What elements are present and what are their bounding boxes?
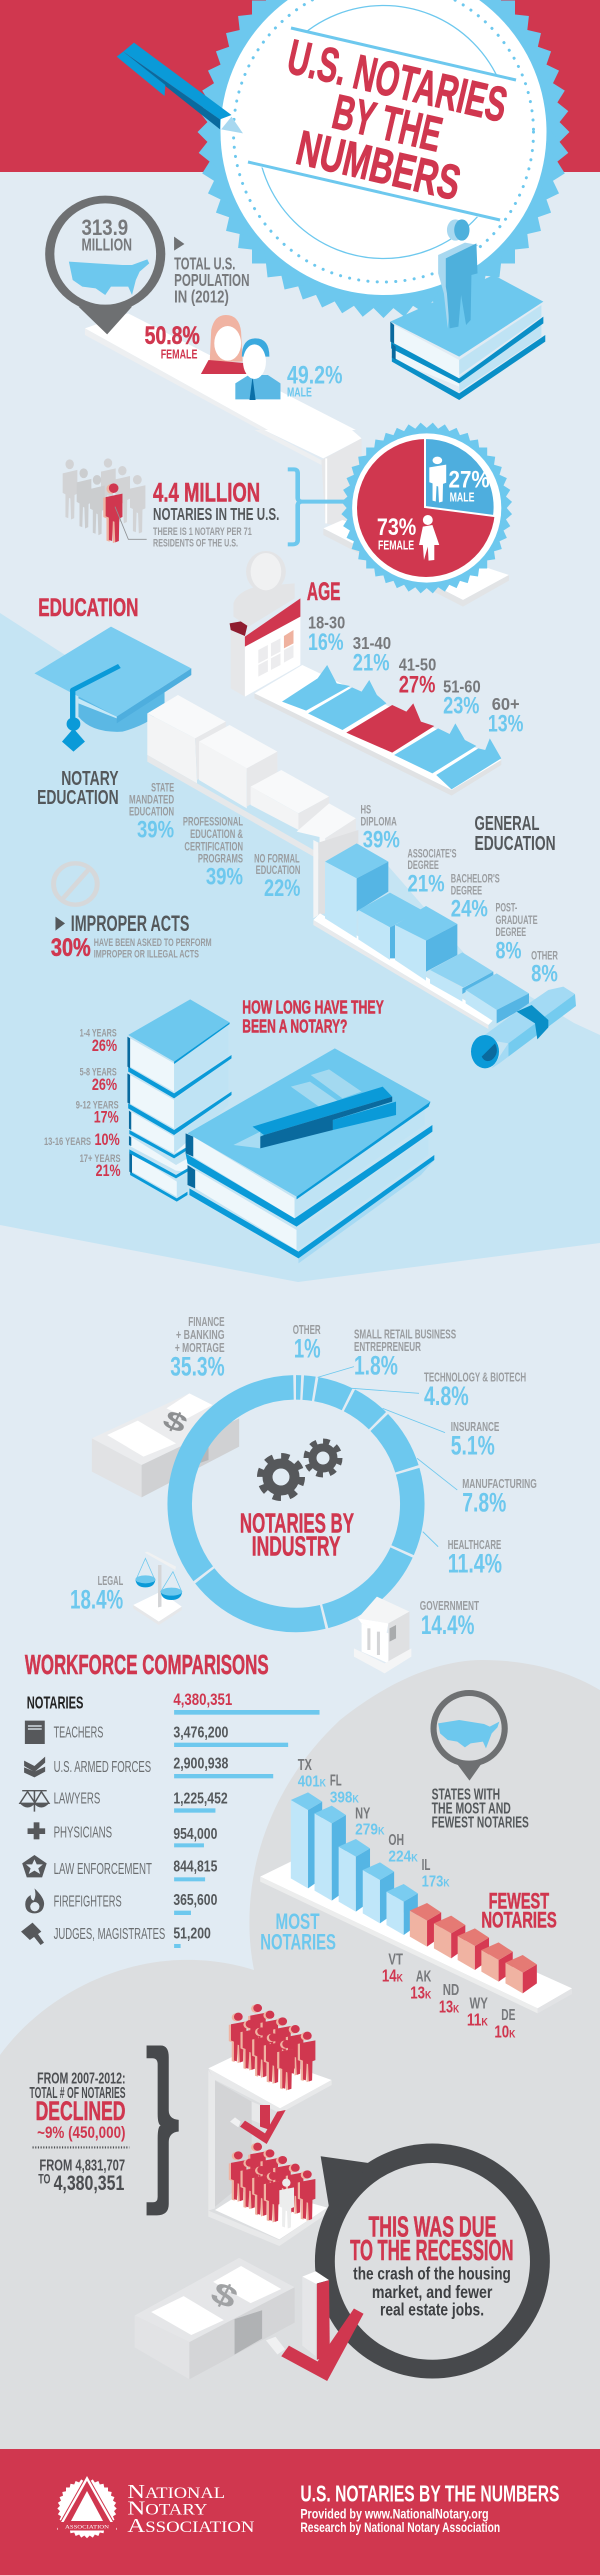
years labels: 26% xyxy=(92,1036,117,1055)
heading: how long xyxy=(242,998,384,1037)
title seal xyxy=(198,0,569,318)
state mandated education: MANDATED xyxy=(129,792,174,806)
panel: notaries by industry: LEGAL xyxy=(98,1574,123,1589)
manufacturing share: 7.8% xyxy=(462,1488,506,1518)
donut chart xyxy=(180,1387,412,1620)
row: firefighters xyxy=(25,1888,217,1915)
brace xyxy=(147,2045,179,2215)
post-graduate degree: POST- xyxy=(496,901,517,914)
heading: how long: BEEN A NOTARY? xyxy=(242,1017,347,1037)
states caption: STATES WITH xyxy=(432,1786,500,1803)
associate's degree xyxy=(408,846,457,897)
bachelor's degree xyxy=(451,871,500,922)
years labels: 5-8 YEARS xyxy=(80,1067,117,1078)
fewest notaries label: FEWEST xyxy=(489,1890,549,1914)
years labels xyxy=(44,1028,121,1180)
state labels: most: TX xyxy=(298,1755,312,1774)
row: notaries: NOTARIES xyxy=(27,1693,83,1712)
row: physicians xyxy=(28,1822,217,1847)
post-graduate degree: GRADUATE xyxy=(496,913,538,927)
row: law enforcement xyxy=(22,1855,218,1881)
insurance share: INSURANCE xyxy=(451,1420,499,1435)
state labels: most: NY xyxy=(355,1803,371,1822)
heading: age: AGE xyxy=(307,577,341,606)
finance share: + MORTAGE xyxy=(175,1341,225,1356)
associate's degree: 21% xyxy=(408,871,445,897)
notary education label xyxy=(37,766,119,809)
panel: states with most and fewest notaries xyxy=(260,1690,572,2041)
government share: GOVERNMENT xyxy=(420,1599,479,1614)
post-graduate degree xyxy=(496,901,538,964)
state labels: most: IL xyxy=(422,1855,430,1874)
row: notaries: 4,380,351 xyxy=(173,1690,232,1709)
age strip base xyxy=(254,665,501,796)
improper acts text: IMPROPER ACTS xyxy=(71,912,189,937)
row: lawyers xyxy=(20,1788,228,1813)
pie seal xyxy=(341,423,512,593)
heading: general education: GENERAL xyxy=(474,811,540,835)
state mandated education xyxy=(129,781,174,843)
platform xyxy=(260,1862,572,2013)
decline text: ~9% (450,000) xyxy=(37,2123,126,2142)
professional education: PROGRAMS xyxy=(198,851,243,865)
no formal education: EDUCATION xyxy=(256,863,300,877)
state labels: fewest: 11K xyxy=(467,2010,488,2029)
icon: person standing on book stack xyxy=(390,219,545,400)
states caption xyxy=(432,1786,529,1831)
years labels: 17+ YEARS xyxy=(80,1154,121,1165)
improper acts text: HAVE BEEN ASKED TO PERFORM xyxy=(94,936,212,949)
row: judges: JUDGES, MAGISTRATES xyxy=(54,1924,165,1943)
associate's degree: DEGREE xyxy=(408,858,439,872)
icon: prohibited sign xyxy=(54,863,97,905)
header band xyxy=(0,0,600,172)
elevator frame with two platforms xyxy=(208,2050,332,2246)
other education: 8% xyxy=(531,961,558,987)
icon: money stack xyxy=(135,2258,295,2379)
technology share: 4.8% xyxy=(424,1382,469,1412)
row: teachers: TEACHERS xyxy=(54,1722,103,1741)
small retail share: SMALL RETAIL BUSINESS xyxy=(354,1327,456,1342)
years labels: 17% xyxy=(94,1108,119,1126)
icon: woman xyxy=(201,315,251,374)
small retail share xyxy=(354,1327,456,1381)
healthcare share xyxy=(448,1538,502,1579)
legal share xyxy=(70,1574,123,1615)
states caption: FEWEST NOTARIES xyxy=(432,1814,529,1831)
icon: money stack xyxy=(92,1393,239,1497)
total population label: POPULATION xyxy=(174,270,249,290)
age labels: 18-30 xyxy=(308,613,345,633)
red crowd bottom with one gray figure xyxy=(229,2143,315,2229)
state labels: fewest: 13K xyxy=(439,1997,459,2016)
row: armed forces: 2,900,938 xyxy=(173,1753,229,1772)
decline text: FROM 2007-2012: xyxy=(37,2070,126,2088)
fewest notaries label xyxy=(481,1890,557,1933)
age labels: 60+ xyxy=(492,694,520,715)
footer band xyxy=(0,2449,600,2575)
red crowd top xyxy=(229,2004,315,2090)
footer credits: Research by National Notary Association xyxy=(300,2520,500,2535)
notaries count: RESIDENTS OF THE U.S. xyxy=(153,536,238,549)
logo seal xyxy=(56,2475,118,2538)
row: armed forces xyxy=(24,1753,273,1778)
state labels: most: OH xyxy=(388,1830,404,1849)
row: law enforcement: 844,815 xyxy=(173,1857,218,1875)
row: lawyers: 1,225,452 xyxy=(173,1788,228,1807)
most notaries label: MOST xyxy=(276,1910,320,1935)
decline text xyxy=(29,2070,129,2195)
icon: scales xyxy=(133,1552,182,1625)
bachelor's degree: DEGREE xyxy=(451,883,482,897)
years labels: 21% xyxy=(96,1161,121,1180)
state mandated education: STATE xyxy=(151,781,174,794)
icon: female figure xyxy=(419,515,439,561)
small retail share: 1.8% xyxy=(354,1351,398,1381)
logo wordmark: NATIONAL xyxy=(127,2480,225,2503)
other share: OTHER xyxy=(293,1323,321,1338)
row: judges xyxy=(21,1923,211,1948)
improper acts text xyxy=(51,912,212,962)
state labels: most: 279K xyxy=(355,1819,385,1838)
other share xyxy=(293,1323,321,1364)
decline text: 4,380,351 xyxy=(54,2171,124,2195)
icon: calendar stamp xyxy=(230,551,300,697)
notaries count: THERE IS 1 NOTARY PER 71 xyxy=(153,525,252,538)
other share: 1% xyxy=(294,1334,321,1364)
icon: male figure xyxy=(429,457,446,503)
female share: FEMALE xyxy=(161,347,197,361)
HS diploma: 39% xyxy=(363,827,400,853)
row: teachers xyxy=(25,1721,288,1747)
state labels: fewest: DE xyxy=(501,2005,515,2024)
healthcare share: 11.4% xyxy=(448,1549,502,1579)
panel: workforce comparisons xyxy=(20,1650,320,1948)
row: lawyers: LAWYERS xyxy=(54,1788,100,1807)
heading: notaries by industry: NOTARIES BY xyxy=(240,1509,354,1539)
icon: diploma scroll xyxy=(471,987,576,1068)
notaries count: 4.4 MILLION xyxy=(153,478,260,508)
male share xyxy=(448,467,490,505)
state mandated education: EDUCATION xyxy=(129,805,174,818)
icon: crowd with one notary highlighted xyxy=(63,458,147,543)
total population label xyxy=(174,237,249,306)
icon: government building xyxy=(354,1597,411,1673)
panel: how long notary xyxy=(44,998,434,1263)
row: firefighters: FIREFIGHTERS xyxy=(54,1891,122,1910)
icon: pen pointing at seal xyxy=(117,43,243,133)
speech bubble: real estate jobs. xyxy=(380,2299,484,2319)
female share: 73% xyxy=(377,515,416,541)
state labels: fewest: 10K xyxy=(494,2022,516,2041)
no formal education: NO FORMAL xyxy=(254,851,300,865)
column and base of notaries shelf xyxy=(254,430,509,607)
small retail share: ENTREPRENEUR xyxy=(354,1340,421,1355)
legal share: 18.4% xyxy=(70,1585,123,1615)
state mandated education: 39% xyxy=(137,817,174,843)
no formal education xyxy=(254,851,300,902)
associate's degree: ASSOCIATE'S xyxy=(408,846,457,860)
row: armed forces: U.S. ARMED FORCES xyxy=(54,1757,151,1776)
heading: notaries by industry: INDUSTRY xyxy=(252,1532,341,1562)
total population label: IN (2012) xyxy=(174,287,229,306)
row: judges: 51,200 xyxy=(173,1923,211,1942)
icon: map pin with population xyxy=(45,196,165,334)
row: law enforcement: LAW ENFORCEMENT xyxy=(54,1859,152,1878)
logo wordmark: NOTARY xyxy=(127,2496,208,2519)
female share: 50.8% xyxy=(145,321,200,350)
decline text: FROM 4,831,707 xyxy=(39,2157,125,2174)
heading: education: EDUCATION xyxy=(38,593,139,622)
icon: map pin with population: 313.9 xyxy=(82,216,128,241)
seal starburst xyxy=(198,0,569,318)
panel: number of notaries xyxy=(63,458,346,549)
row: physicians: PHYSICIANS xyxy=(54,1823,112,1841)
stacked small books xyxy=(127,999,232,1202)
education steps xyxy=(147,695,356,860)
professional education: 39% xyxy=(206,864,243,890)
heading: workforce comparisons: WORKFORCE COMPARISONS xyxy=(25,1650,269,1681)
male share: MALE xyxy=(450,491,474,505)
state labels: fewest: ND xyxy=(443,1980,459,1999)
panel: gender of notaries pie xyxy=(341,423,512,593)
years labels: 26% xyxy=(92,1075,117,1094)
age labels xyxy=(308,613,523,737)
speech bubble: market, and fewer xyxy=(372,2282,492,2302)
row: teachers: 3,476,200 xyxy=(173,1723,228,1741)
footer credits xyxy=(300,2481,559,2535)
decline text: TO xyxy=(38,2171,51,2186)
logo wordmark xyxy=(127,2480,255,2537)
healthcare share: HEALTHCARE xyxy=(448,1538,501,1553)
state labels: most: FL xyxy=(330,1771,342,1789)
age labels: 16% xyxy=(308,630,344,656)
years labels: 9-12 YEARS xyxy=(76,1100,119,1111)
age labels: 51-60 xyxy=(443,677,481,697)
age labels: 41-50 xyxy=(399,655,436,675)
age labels: 31-40 xyxy=(353,633,391,654)
other education: OTHER xyxy=(531,948,558,962)
male share xyxy=(287,360,342,399)
finance share: 35.3% xyxy=(170,1352,225,1382)
total population label: TOTAL U.S. xyxy=(174,254,235,273)
notaries count xyxy=(153,478,279,549)
heading: general education xyxy=(474,811,556,855)
notary education label: EDUCATION xyxy=(37,785,119,809)
bars: fewest notaries xyxy=(410,1903,537,1993)
title: BY THE xyxy=(328,85,447,162)
speech bubble xyxy=(315,2144,550,2379)
HS diploma xyxy=(360,802,400,853)
decline text: DECLINED xyxy=(36,2096,126,2126)
state labels: most: 398K xyxy=(330,1787,359,1806)
panel: improper acts xyxy=(51,863,212,962)
decline text: TOTAL # OF NOTARIES xyxy=(29,2084,126,2102)
post-graduate degree: DEGREE xyxy=(496,925,526,939)
panel: general education xyxy=(313,802,576,1068)
male share: 27% xyxy=(448,467,490,493)
panel: population xyxy=(45,196,342,400)
HS diploma: HS xyxy=(360,802,371,816)
insurance share xyxy=(451,1420,499,1461)
no formal education: 22% xyxy=(264,876,300,902)
icon: money stack: $ xyxy=(205,2275,243,2315)
panel: notary education xyxy=(34,593,356,902)
state labels: fewest xyxy=(382,1949,516,2041)
insurance share: 5.1% xyxy=(451,1431,495,1461)
panel: age xyxy=(230,551,523,796)
logo seal: ASSOCIATION xyxy=(65,2524,109,2530)
post-graduate degree: 8% xyxy=(496,938,522,964)
manufacturing share xyxy=(462,1477,537,1518)
female share xyxy=(145,321,200,361)
icon: gears xyxy=(260,1442,340,1498)
speech bubble: THIS WAS DUE xyxy=(368,2212,496,2243)
title: NUMBERS xyxy=(292,121,465,211)
bachelor's degree: BACHELOR'S xyxy=(451,871,500,885)
state labels: fewest: 14K xyxy=(382,1966,403,1985)
footer logo: National Notary Association xyxy=(56,2475,255,2538)
icon: map pin with population: MILLION xyxy=(82,235,132,254)
years labels: 13-16 YEARS xyxy=(44,1137,91,1148)
other education xyxy=(531,948,558,987)
professional education xyxy=(183,815,243,890)
state labels: fewest: AK xyxy=(416,1967,432,1985)
female share xyxy=(377,515,416,553)
row: notaries xyxy=(27,1690,320,1715)
leader lines xyxy=(318,1367,457,1547)
states caption: THE MOST AND xyxy=(432,1800,511,1817)
government share: 14.4% xyxy=(421,1611,474,1640)
speech bubble: the crash of the housing xyxy=(353,2263,511,2283)
notary education label: NOTARY xyxy=(61,766,119,790)
heading: notaries by industry xyxy=(240,1509,354,1562)
state labels: fewest: VT xyxy=(388,1949,403,1968)
bachelor's degree: 24% xyxy=(451,896,488,922)
professional education: EDUCATION & xyxy=(190,827,243,841)
age bars xyxy=(282,665,501,789)
icon: money stack: $ xyxy=(158,1405,192,1439)
row: physicians: 954,000 xyxy=(173,1824,217,1843)
improper acts text: IMPROPER OR ILLEGAL ACTS xyxy=(94,947,199,960)
male share: 49.2% xyxy=(287,360,342,389)
general education blocks xyxy=(313,830,529,1029)
logo wordmark: ASSOCIATION xyxy=(127,2514,255,2537)
improper acts text: 30% xyxy=(51,934,91,962)
panel: notaries by industry xyxy=(70,1315,537,1673)
professional education: CERTIFICATION xyxy=(184,839,243,853)
notaries count: NOTARIES IN THE U.S. xyxy=(153,504,279,525)
government share xyxy=(420,1599,479,1640)
technology share xyxy=(424,1371,526,1412)
state labels: most xyxy=(298,1755,450,1890)
state labels: most: 173K xyxy=(422,1872,450,1890)
finance share: + BANKING xyxy=(176,1328,225,1343)
state labels: fewest: 13K xyxy=(410,1983,431,2002)
age labels: 13% xyxy=(488,711,523,737)
finance share xyxy=(170,1315,225,1382)
manufacturing share: MANUFACTURING xyxy=(462,1477,537,1492)
age labels: 27% xyxy=(399,672,435,698)
bracket xyxy=(288,469,346,544)
most notaries label: NOTARIES xyxy=(260,1931,336,1955)
state labels: most: 224K xyxy=(388,1847,418,1865)
HS diploma: DIPLOMA xyxy=(360,814,397,828)
arrow down 2 xyxy=(266,2271,364,2381)
icon: graduation cap xyxy=(34,627,191,752)
age labels: 21% xyxy=(353,650,390,676)
bars: most notaries xyxy=(291,1792,418,1935)
row: firefighters: 365,600 xyxy=(173,1890,217,1909)
heading: how long: HOW LONG HAVE THEY xyxy=(242,998,384,1018)
state labels: most: 401K xyxy=(298,1772,327,1790)
state labels: fewest: WY xyxy=(470,1993,488,2012)
years labels: 10% xyxy=(95,1130,120,1149)
footer credits: Provided by www.NationalNotary.org xyxy=(300,2506,489,2521)
arrow down 1 xyxy=(230,2102,286,2144)
icon: man xyxy=(235,338,280,400)
panel: decline xyxy=(29,2004,550,2381)
age labels: 23% xyxy=(443,693,479,719)
large book stack with pen xyxy=(186,1048,434,1263)
years labels: 1-4 YEARS xyxy=(80,1028,117,1039)
finance share: FINANCE xyxy=(188,1315,225,1330)
title xyxy=(283,30,512,211)
white path from population to notaries xyxy=(85,313,356,430)
most notaries label xyxy=(260,1910,336,1955)
icon: map pin xyxy=(430,1690,508,1781)
professional education: PROFESSIONAL xyxy=(183,815,243,828)
female share: FEMALE xyxy=(378,538,414,553)
male share: MALE xyxy=(287,386,312,399)
